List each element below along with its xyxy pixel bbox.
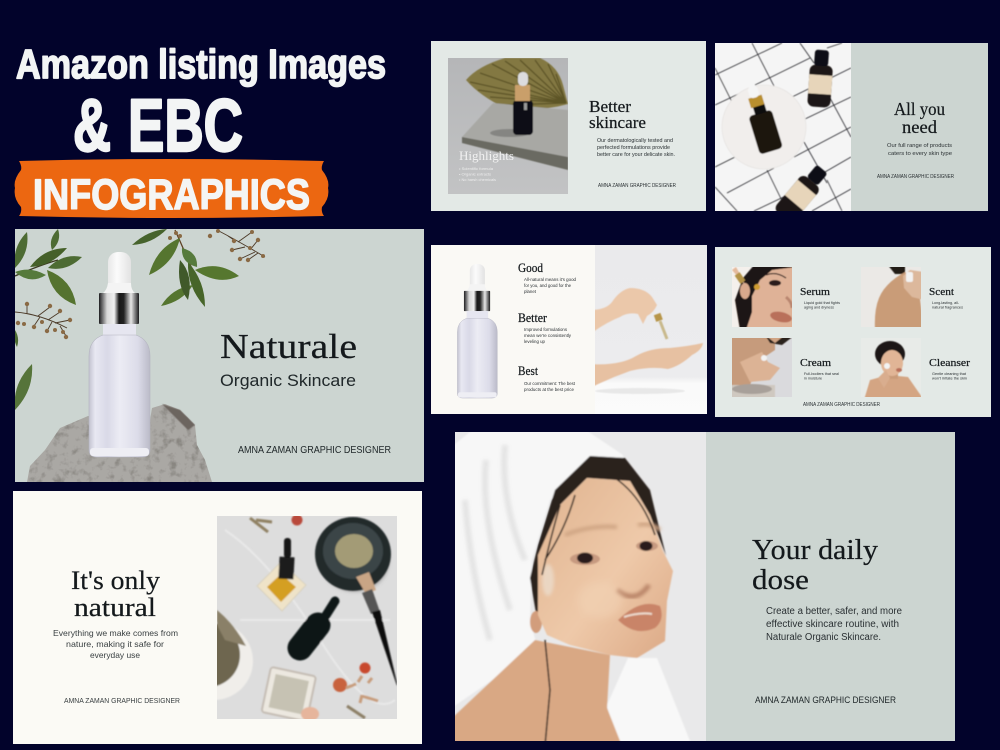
item: Good: for you, and good for the (524, 283, 572, 288)
item: Better: leveling up (524, 339, 546, 344)
photo: black bottle with dried palm leaf (448, 58, 568, 194)
panel: It's only natural (13, 491, 422, 744)
description text: effective skincare routine, with (766, 619, 899, 630)
heading: Better skincare (589, 97, 646, 132)
item: Cream: Full-bodiers that seal (804, 372, 839, 376)
item: Cream (800, 357, 839, 380)
face (538, 478, 673, 658)
item: Better (518, 310, 572, 344)
heading: Better skincare: Better (589, 97, 632, 116)
ear (530, 611, 542, 633)
hair (530, 456, 666, 625)
credit line: AMNA ZAMAN GRAPHIC DESIGNER (64, 696, 180, 705)
photo: hands with dropper (590, 245, 707, 414)
towel (450, 428, 623, 709)
item: Good (518, 260, 577, 294)
panel: Naturale Organic Skincare (14, 229, 424, 482)
item: Scent (929, 286, 963, 310)
description text: caters to every skin type (888, 151, 952, 157)
item: Best: Best (518, 363, 538, 378)
item: Good: Good (518, 260, 543, 275)
item: Cream: in moisture (804, 376, 822, 380)
panel: Good Better Best (431, 245, 707, 414)
item: Serum: Serum (800, 286, 830, 298)
heading: All you need: All you (894, 99, 945, 119)
item: Serum: aging and dryness (804, 306, 834, 310)
item: Good: All-natural means it's good (524, 277, 577, 282)
description text (53, 628, 178, 660)
orange ribbon banner (15, 159, 328, 218)
panel: Better skincare (431, 41, 706, 211)
description text: Our full range of products (887, 143, 952, 149)
heading: All you need (894, 99, 945, 137)
item: Best: Our commitment: The best (524, 381, 576, 386)
credit line: AMNA ZAMAN GRAPHIC DESIGNER (803, 402, 880, 408)
description text (887, 143, 952, 157)
heading: Your daily dose: Your daily (752, 534, 879, 566)
description text (597, 138, 675, 158)
botanical leaves and berry sprigs (14, 229, 265, 410)
subheading: Organic Skincare: Organic Skincare (220, 371, 356, 390)
photo caption: Highlights: • No harsh chemicals (459, 178, 496, 182)
heading: EBC: EBC (128, 84, 243, 167)
description text: perfected formulations provide (597, 145, 670, 151)
item: Cleanser (929, 357, 970, 380)
photo caption: Highlights: • Organic extracts (459, 172, 491, 176)
panel: product range (715, 247, 991, 417)
heading: Better skincare: skincare (589, 113, 646, 132)
photo caption: Highlights: Highlights (459, 148, 514, 163)
description text: Our dermatologically tested and (597, 138, 673, 144)
photo caption: Highlights: • Scientific formula (459, 167, 494, 171)
item: Best: products at the best price (524, 387, 575, 392)
item: Better: Improved formulations (524, 327, 567, 332)
item: Cleanser: Gentle cleaning that (932, 372, 966, 376)
title block (15, 41, 386, 219)
item: Cleanser: Cleanser (929, 357, 970, 369)
photo: bottles and herbs on marble (217, 516, 397, 719)
heading: It's only natural: natural (74, 593, 156, 622)
description text: nature, making it safe for (66, 639, 164, 649)
photo: cleanser (864, 340, 921, 397)
wet hair strands (542, 472, 655, 746)
rock (27, 404, 212, 482)
heading: Your daily dose (752, 534, 879, 596)
description text: better care for your delicate skin. (597, 152, 675, 158)
item: Serum: Liquid gold that fights (804, 301, 840, 305)
item: Scent: Scent (929, 286, 954, 298)
photo caption: Highlights (459, 148, 514, 182)
description text (766, 606, 902, 643)
heading: Naturale: Naturale (220, 327, 357, 366)
item: Serum (800, 286, 840, 310)
description text: Everything we make comes from (53, 628, 178, 638)
panel: All you need (715, 43, 988, 224)
photo: woman with towel wrap (450, 428, 706, 746)
heading: It's only natural (71, 566, 160, 622)
banner label: INFOGRAPHICS: INFOGRAPHICS (33, 171, 310, 219)
neck and shoulders (450, 640, 622, 746)
heading: All you need: need (902, 117, 937, 137)
description text: Naturale Organic Skincare. (766, 632, 881, 643)
dropper bottle (457, 264, 497, 398)
photo: amber bottles on white grid tile (715, 43, 851, 224)
item: Cream: Cream (800, 357, 831, 369)
item: Scent: natural fragrances (932, 306, 963, 310)
heading: Amazon listing Images: Amazon listing Images (16, 41, 386, 87)
item: Scent: Long-lasting, all- (932, 301, 960, 305)
description text: Create a better, safer, and more (766, 606, 902, 617)
item: Good: planet (524, 289, 537, 294)
credit line: AMNA ZAMAN GRAPHIC DESIGNER (598, 183, 676, 189)
item: Better: mean we're consistently (524, 333, 572, 338)
item: Best (518, 363, 576, 392)
dropper bottle (89, 252, 150, 457)
credit line: AMNA ZAMAN GRAPHIC DESIGNER (877, 174, 954, 180)
item: Cleanser: won't irritate the skin (932, 376, 967, 380)
photo: shoulder (874, 267, 921, 327)
heading: Your daily dose: dose (752, 564, 809, 596)
heading: ampersand: & (73, 84, 111, 167)
facial features (542, 524, 662, 631)
credit line: AMNA ZAMAN GRAPHIC DESIGNER (755, 695, 896, 706)
photo: cream (732, 338, 792, 397)
description text: everyday use (90, 650, 140, 660)
item: Better: Better (518, 310, 548, 325)
panel: Your daily dose (450, 428, 955, 746)
heading: It's only natural: It's only (71, 566, 160, 595)
credit line: AMNA ZAMAN GRAPHIC DESIGNER (238, 445, 391, 456)
photo: serum on cheek (732, 267, 792, 327)
